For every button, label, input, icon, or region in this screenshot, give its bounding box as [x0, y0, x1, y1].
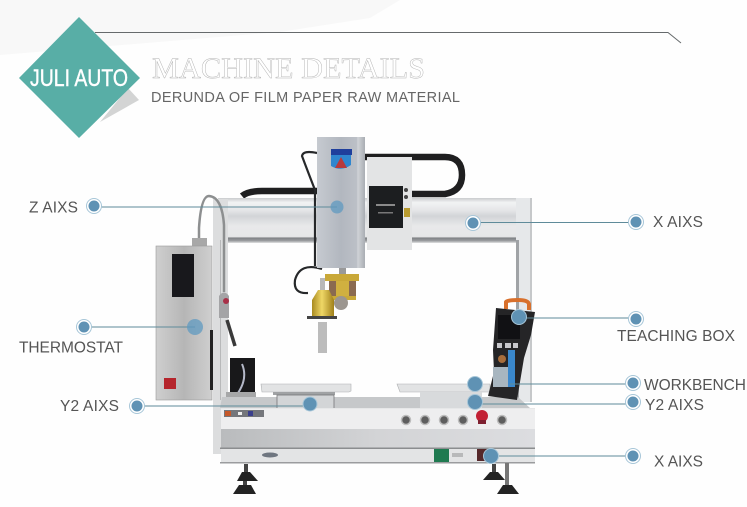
callout: left Y2 axis: [60, 397, 317, 415]
machine base: [221, 408, 535, 463]
callout: teaching box: TEACHING BOX: [617, 328, 736, 345]
header rule: [95, 32, 681, 43]
right fixture: [397, 384, 490, 392]
z head plate: [367, 157, 412, 250]
left column: [213, 199, 228, 454]
gooseneck lamp: [199, 196, 224, 292]
teaching box: [488, 300, 535, 400]
cable chain: [242, 157, 462, 196]
callout: lower X axis: X AIXS: [654, 454, 703, 470]
power socket: [434, 449, 463, 462]
right column: [516, 198, 532, 402]
callout: thermostat: [19, 319, 203, 356]
left fixture: [261, 384, 351, 392]
callout: Z axis: [29, 198, 344, 216]
z axis head: [317, 137, 365, 268]
callout: left Y2 axis: Y2 AIXS: [60, 398, 119, 415]
callout: right Y2 axis: Y2 AIXS: [645, 397, 704, 414]
callout: Z axis: Z AIXS: [29, 200, 78, 216]
z axis hoses: [302, 152, 317, 266]
title: MACHINE DETAILS: [152, 53, 425, 85]
callout: workbench: WORKBENCH: [644, 377, 746, 394]
callout: workbench: [468, 376, 746, 394]
dispensing valve: [339, 268, 346, 276]
logo diamond: JULI AUTO: [30, 65, 128, 92]
subtitle: DERUNDA OF FILM PAPER RAW MATERIAL: [151, 90, 460, 106]
callout: right Y2 axis: [468, 394, 704, 414]
syringe holder: [230, 358, 255, 400]
gantry beam: [218, 198, 532, 243]
machine: [156, 137, 535, 494]
warning labels: [224, 410, 264, 417]
head badge: [331, 149, 351, 169]
feet: [233, 463, 519, 494]
panel buttons: [402, 416, 506, 424]
callout: lower X axis: [484, 448, 703, 470]
callout: upper X axis: X AIXS: [653, 214, 703, 231]
emergency stop: [476, 410, 488, 424]
callout: upper X axis: [466, 214, 703, 231]
callout: teaching box: [512, 310, 736, 345]
logo diamond: [19, 17, 140, 138]
thermostat box: [156, 246, 212, 400]
work plate: [220, 397, 530, 408]
callout: thermostat: THERMOSTAT: [19, 340, 124, 356]
